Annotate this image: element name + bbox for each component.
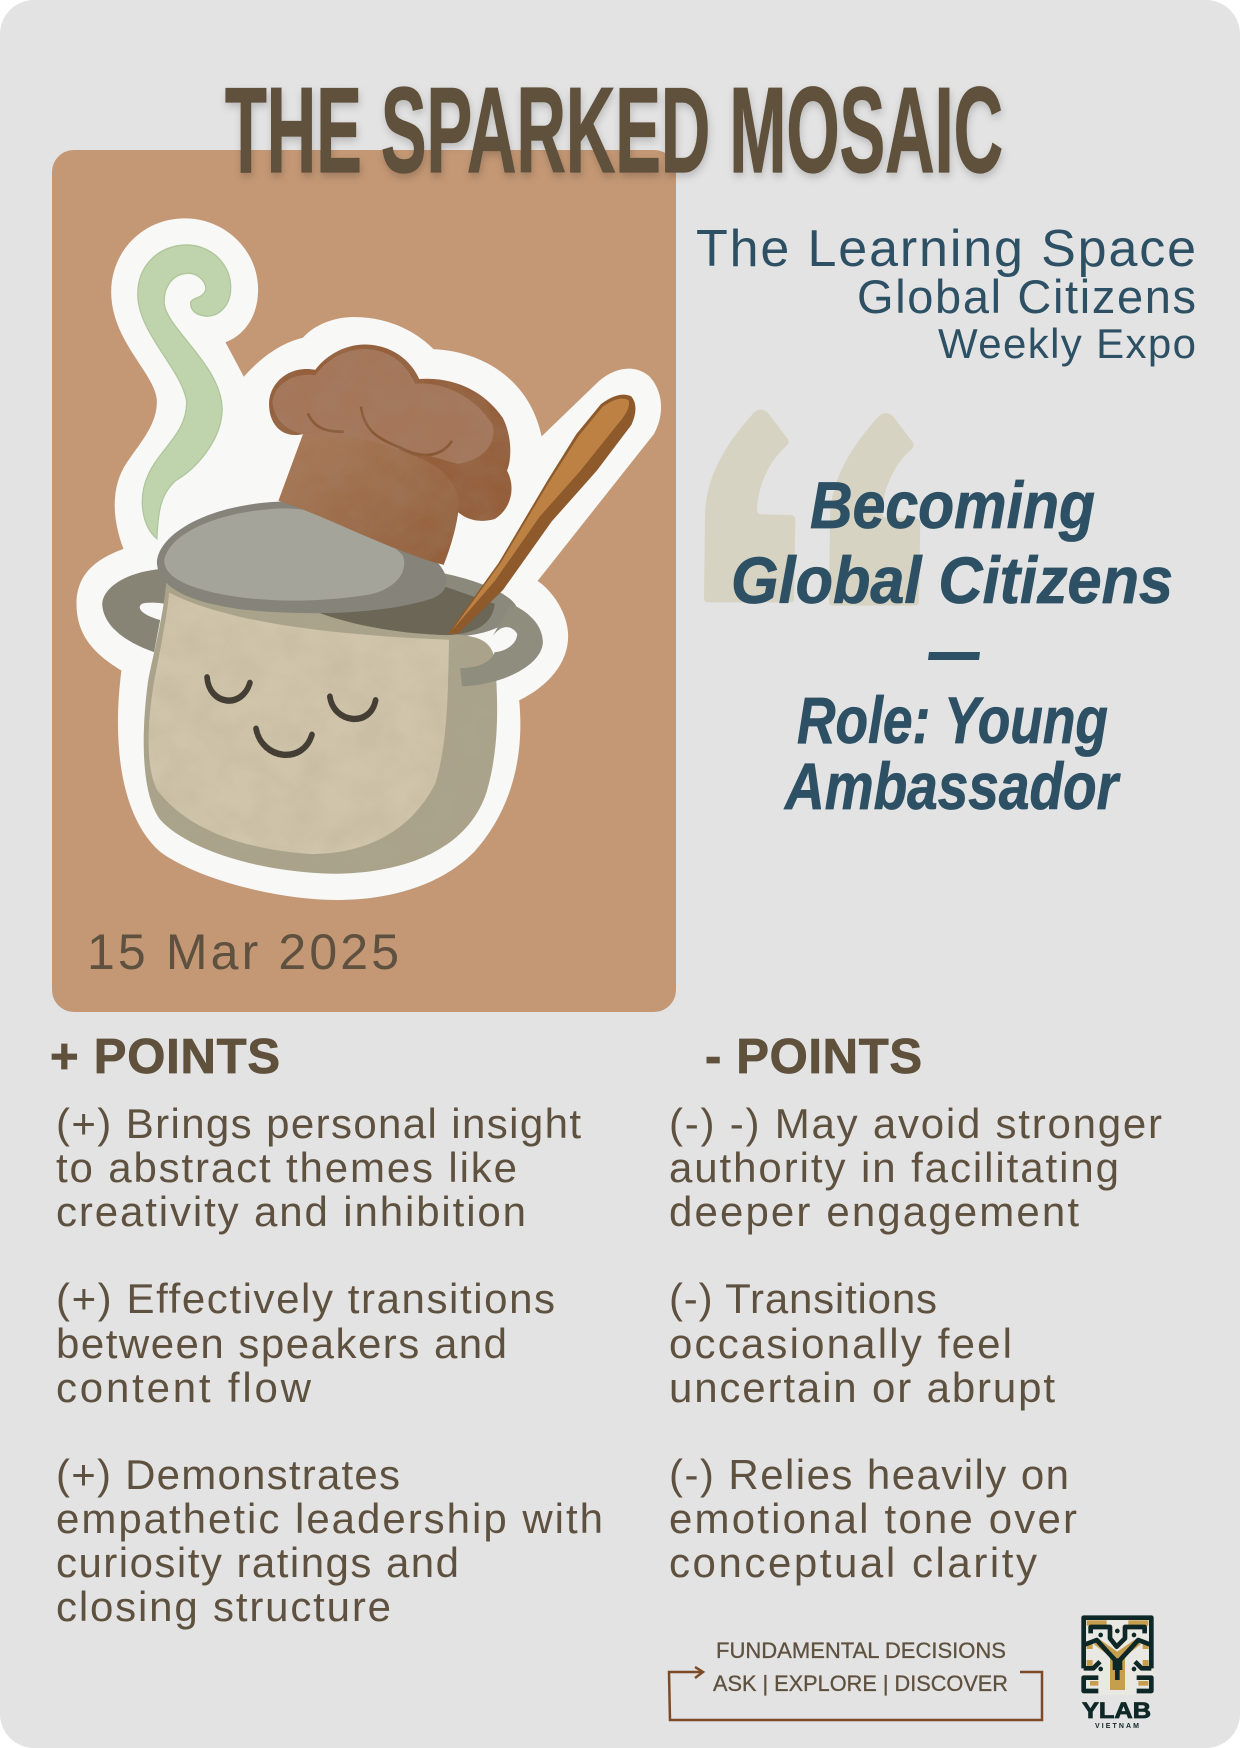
text block: positive points: between speakers and: [56, 1320, 507, 1367]
footer tagline: [713, 1638, 1008, 1696]
date: 15 Mar 2025: [87, 924, 399, 980]
quote text: theme and role: Role: Young: [797, 683, 1108, 757]
heading: minus points: - POINTS: [705, 1030, 922, 1084]
sticker white outline: [77, 218, 661, 900]
heading: plus points: + POINTS: [50, 1030, 280, 1084]
text block: positive points: empathetic leadership with: [56, 1495, 603, 1542]
text block: positive points: closing structure: [56, 1583, 391, 1630]
text block: positive points: content flow: [56, 1364, 312, 1411]
text block: negative points: authority in facilitating: [669, 1144, 1119, 1191]
illustration: smiling pot sticker: [77, 218, 661, 900]
text block: negative points: conceptual clarity: [669, 1539, 1037, 1586]
text block: negative points: occasionally feel: [669, 1320, 1012, 1367]
logo subtitle: VIETNAM: [1095, 1723, 1139, 1730]
wooden spoon: [448, 395, 635, 634]
event heading: The Learning Space: [696, 220, 1196, 278]
text block: negative points: uncertain or abrupt: [669, 1364, 1055, 1411]
text block: negative points: (-) Relies heavily on: [669, 1451, 1069, 1498]
arrow: loop around tagline: [669, 1667, 1042, 1720]
text block: positive points: (+) Brings personal insight: [56, 1100, 581, 1147]
event heading: Global Citizens: [857, 270, 1196, 323]
pot interior shadow: [311, 586, 495, 635]
logo mark: [1082, 1616, 1153, 1695]
text block: positive points: curiosity ratings and: [56, 1539, 459, 1586]
quote text: theme and role: Becoming: [810, 468, 1095, 542]
event heading: Weekly Expo: [938, 320, 1196, 367]
logo: YLAB Vietnam: [1082, 1616, 1153, 1730]
event heading: [696, 220, 1196, 367]
chef hat: [269, 344, 512, 565]
icon: green steam: [138, 245, 231, 539]
quote text: theme and role: Ambassador: [783, 749, 1121, 823]
text block: positive points: (+) Demonstrates: [56, 1451, 400, 1498]
quote text: theme and role: [731, 468, 1173, 823]
pot right handle: [460, 604, 543, 687]
text block: positive points: (+) Effectively transitions: [56, 1275, 555, 1322]
text block: positive points: creativity and inhibition: [56, 1188, 526, 1235]
footer tagline: FUNDAMENTAL DECISIONS: [716, 1638, 1006, 1663]
panel: image card: [52, 150, 676, 1012]
pot face: [207, 677, 376, 755]
text block: negative points: (-) -) May avoid stronger: [669, 1100, 1162, 1147]
icon: quotation mark: [704, 410, 920, 606]
text block: positive points: to abstract themes like: [56, 1144, 517, 1191]
pot body: [144, 581, 497, 874]
text block: negative points: (-) Transitions: [669, 1275, 937, 1322]
text block: negative points: deeper engagement: [669, 1188, 1079, 1235]
text block: negative points: [669, 1100, 1162, 1586]
pot left handle: [102, 569, 168, 652]
logo wordmark: YLAB: [1082, 1698, 1151, 1723]
footer tagline: ASK | EXPLORE | DISCOVER: [713, 1671, 1008, 1696]
text block: negative points: emotional tone over: [669, 1495, 1077, 1542]
pot rim: [254, 565, 517, 637]
pot lid: [157, 502, 446, 613]
text block: positive points: [56, 1100, 603, 1630]
quote text: theme and role: Global Citizens: [731, 543, 1173, 617]
